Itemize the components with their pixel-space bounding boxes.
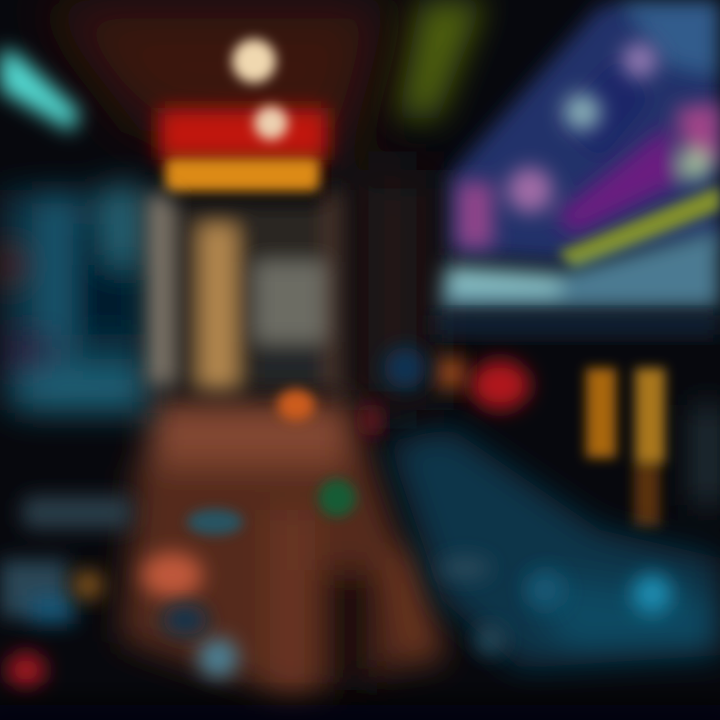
lower left: blue gray furniture [0, 496, 132, 688]
dark blue object [162, 605, 208, 635]
mural yellow-green stripe [558, 186, 720, 270]
mural: colorful mural on the right [435, 0, 720, 335]
lamp: upper white [232, 39, 276, 83]
awning shadow [435, 315, 720, 335]
lamp: lower white [254, 106, 288, 140]
right shop: lit lower shopfront [384, 347, 665, 527]
pale blue object [198, 638, 238, 678]
ceiling: brown wooden ceiling [40, 0, 435, 410]
peach glow [141, 552, 203, 598]
orange glow [438, 358, 464, 388]
teal bowl [187, 509, 243, 535]
gray tables [0, 496, 132, 624]
vignette: dark bottom edge [0, 705, 720, 720]
green ball [318, 479, 356, 517]
streak: cyan neon light [0, 50, 80, 132]
mural background [450, 0, 720, 262]
red glow [6, 652, 46, 688]
storefront: central shop front [148, 39, 342, 390]
sign: orange band [165, 158, 320, 192]
blue orb [384, 347, 426, 389]
sign: red band [158, 108, 328, 160]
amber spot [73, 570, 103, 600]
orange door panels [586, 368, 665, 527]
highlights: blue street glows [439, 557, 672, 655]
orange cushion [277, 389, 315, 421]
red glow [470, 360, 530, 410]
awning: pale blue band [440, 228, 720, 310]
shop interior [148, 190, 342, 390]
floor: brown wooden floor [120, 400, 445, 700]
objects: items on the wooden floor [141, 389, 381, 678]
street: blue glowing floor on the right [388, 405, 720, 668]
window: teal left wall [0, 185, 147, 413]
small red accent [363, 404, 381, 436]
mural patches [457, 42, 720, 248]
streak: olive neon light [398, 0, 485, 118]
